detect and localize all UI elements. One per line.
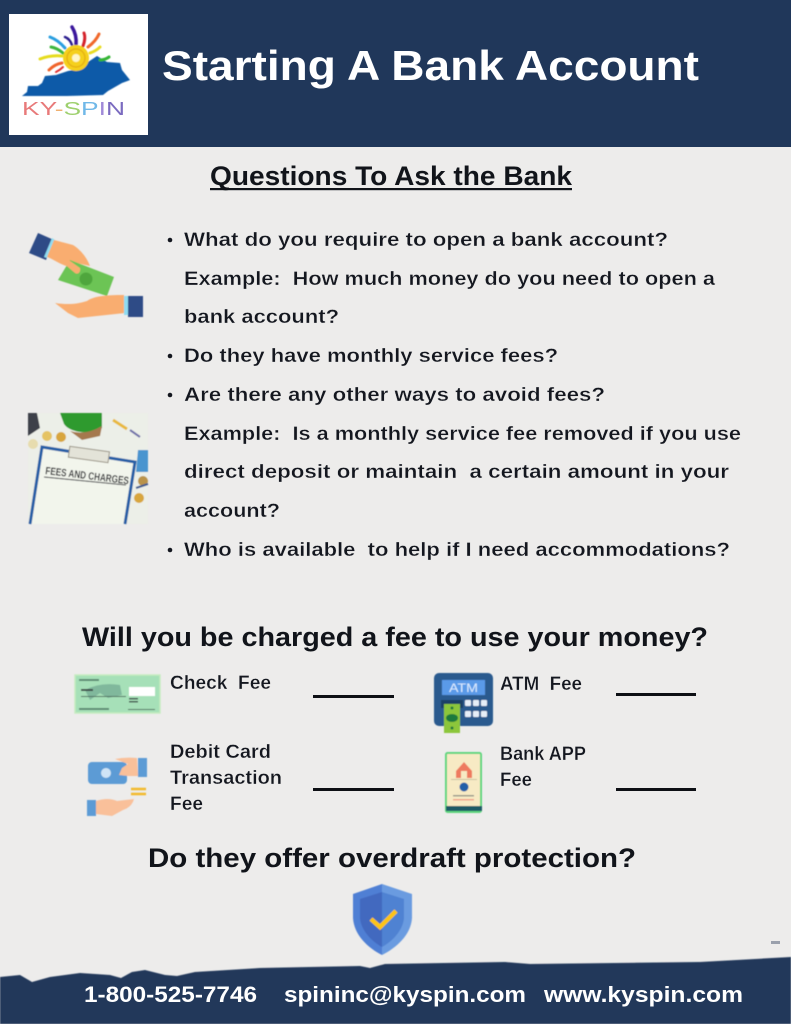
icon: phone with bank [446,753,482,812]
photo: fees and charges clipboard: FEES AND CHARGES [45,465,129,487]
fee: ATM [434,673,696,733]
example 1 [184,268,715,328]
icon: ATM [434,673,493,733]
fee: bank app [446,744,696,812]
icon: hands with bill [87,758,147,816]
bullet 1: What do you require to open a bank account? [184,229,668,251]
example 2: direct deposit or maintain a certain amount in your [184,461,729,483]
heading: questions to ask the bank: Questions To Ask the Bank [210,161,573,191]
header banner [0,0,791,147]
logo: KY-SPIN: KY -S P IN [22,99,125,119]
fee: bank app: Bank APP [500,744,586,765]
fee: debit card transaction: Fee [170,794,203,815]
footer phone: 1-800-525-7746 [84,982,257,1007]
icon: shield with check [353,884,412,955]
footer email: spininc@kyspin.com [284,982,526,1007]
fee: bank app: Fee [500,770,532,791]
heading: will you be charged: Will you be charged a fee to use your money? [82,622,708,652]
example 2: Example: Is a monthly service fee removed if you use [184,423,741,445]
bullet 3: Are there any other ways to avoid fees? [184,384,605,406]
bullet 4: Who is available to help if I need accommodations? [184,539,730,561]
fee: check [75,673,394,713]
mark near footer [771,941,780,944]
example 2 [184,423,741,522]
bullet list: questions [168,229,741,561]
fee: check: Check Fee [170,673,271,694]
title: Starting A Bank Account [162,42,699,89]
footer website: www.kyspin.com [543,982,743,1007]
heading: overdraft protection: Do they offer overdraft protection? [148,843,636,873]
fee: debit card transaction: Transaction [170,768,282,789]
photo: fees and charges clipboard [28,413,148,524]
icon: check [75,675,160,713]
icon: ATM: ATM [449,681,478,695]
example 2: account? [184,500,280,522]
example 1: bank account? [184,306,339,328]
bullet 2: Do they have monthly service fees? [184,345,558,367]
footer band [0,941,791,1024]
logo: KY-SPIN [9,14,148,135]
fee: debit card transaction [87,742,394,816]
icon: hands exchanging money [29,233,143,318]
fee: debit card transaction: Debit Card [170,742,271,763]
example 1: Example: How much money do you need to open a [184,268,715,290]
fee: ATM: ATM Fee [500,674,582,695]
